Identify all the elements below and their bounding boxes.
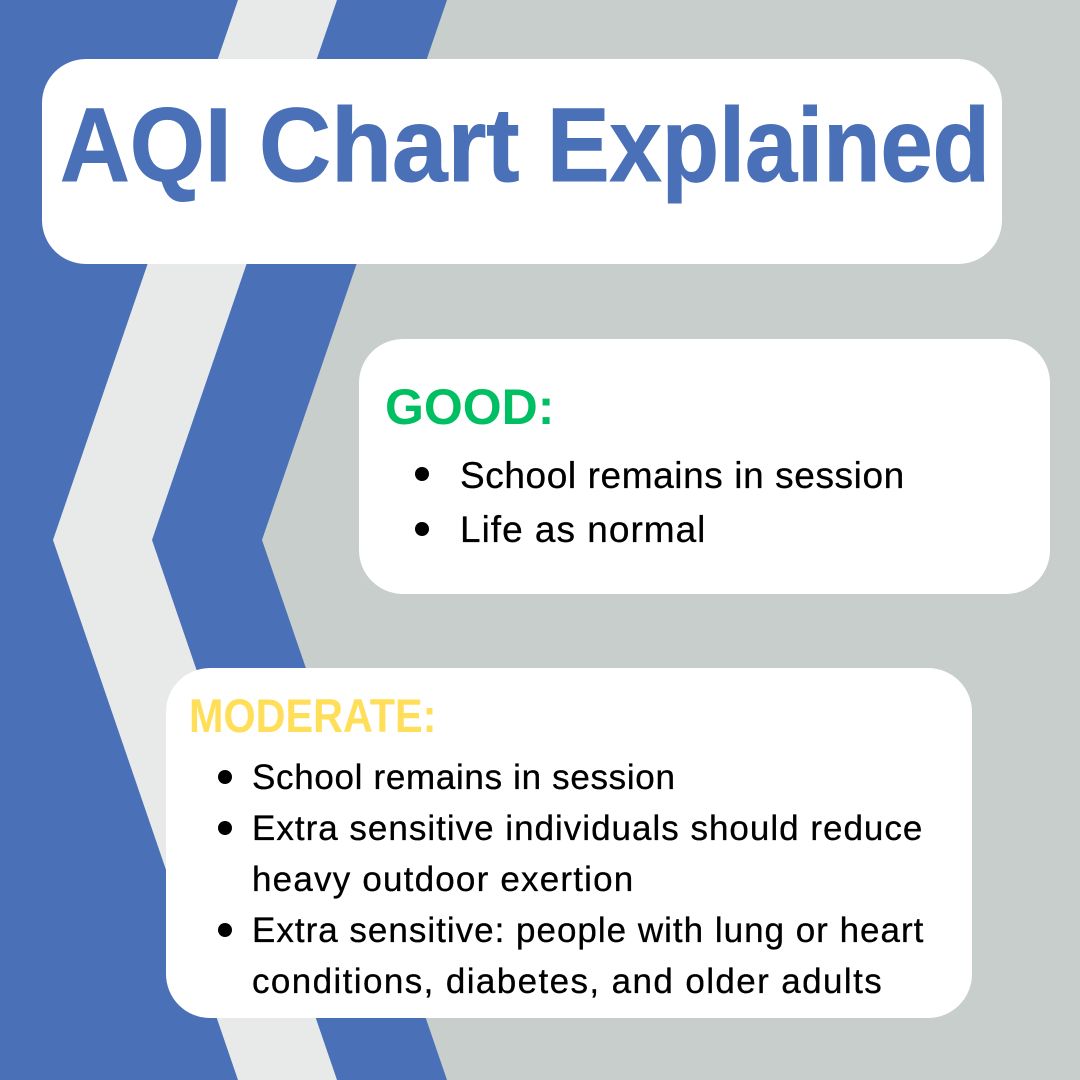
bullet list: good: Life as normal bbox=[460, 509, 706, 550]
title panel bbox=[42, 59, 1002, 264]
bullet list: moderate: conditions, diabetes, and older adults bbox=[252, 962, 883, 1001]
title: Chart bbox=[259, 87, 519, 204]
bullet list: moderate: School remains in session bbox=[252, 758, 676, 797]
bullet list: good: School remains in session bbox=[460, 455, 905, 496]
panel: moderate bbox=[166, 668, 972, 1018]
heading: good: GOOD: bbox=[385, 379, 554, 435]
bullet list: moderate: Extra sensitive: people with lung or heart bbox=[252, 911, 924, 950]
bullet list: moderate bbox=[218, 758, 924, 1001]
bullet list: good bbox=[415, 455, 905, 550]
heading: moderate: MODERATE: bbox=[189, 689, 436, 742]
panel: good bbox=[359, 339, 1050, 594]
bullet list: moderate: heavy outdoor exertion bbox=[252, 860, 634, 899]
bullet list: moderate: Extra sensitive individuals should reduce bbox=[252, 809, 923, 848]
title: Explained bbox=[547, 87, 990, 204]
title: AQI bbox=[60, 87, 232, 204]
title bbox=[60, 87, 990, 204]
